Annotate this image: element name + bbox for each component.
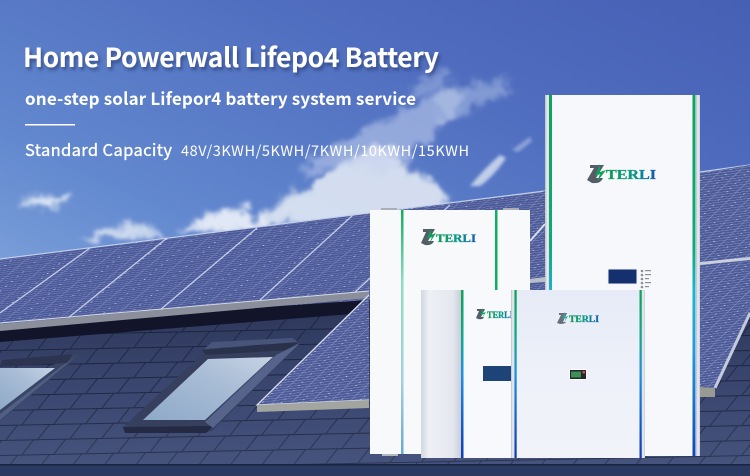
skylight window: left [0, 354, 80, 421]
logo: medium unit: TERLI [436, 231, 476, 245]
battery: medium wall unit [370, 208, 530, 456]
solar panels: lower right [257, 165, 750, 412]
solar panels: upper row [0, 165, 750, 331]
logo: front right unit: TERLI [569, 315, 599, 325]
subtitle: one-step solar Lifepor4 battery system service [25, 85, 416, 110]
capacity values: 48V/3KWH/5KWH/7KWH/10KWH/15KWH [181, 140, 469, 161]
battery: tall tower unit [545, 95, 700, 456]
logo: front left unit [476, 308, 513, 321]
logo: medium unit [421, 228, 476, 245]
roof: slate tiles [0, 290, 750, 476]
background: clouds [12, 72, 532, 238]
display: front left unit [483, 366, 511, 381]
title: Home Powerwall Lifepo4 Battery [23, 36, 439, 75]
indicators: tall unit [641, 270, 651, 288]
logo: front left unit: TERLI [487, 311, 513, 321]
logo: front right unit [557, 312, 599, 325]
logo: tall unit: TERLI [606, 168, 656, 183]
logo: tall unit [587, 164, 656, 183]
divider line [25, 124, 75, 126]
battery: front left unit [421, 290, 515, 458]
display: front right unit [569, 369, 587, 380]
capacity label: Standard Capacity [25, 137, 172, 161]
skylight window: centre [123, 338, 300, 433]
background: blue sky [0, 0, 750, 330]
display: tall unit [608, 269, 637, 284]
battery: front right unit [511, 290, 645, 458]
